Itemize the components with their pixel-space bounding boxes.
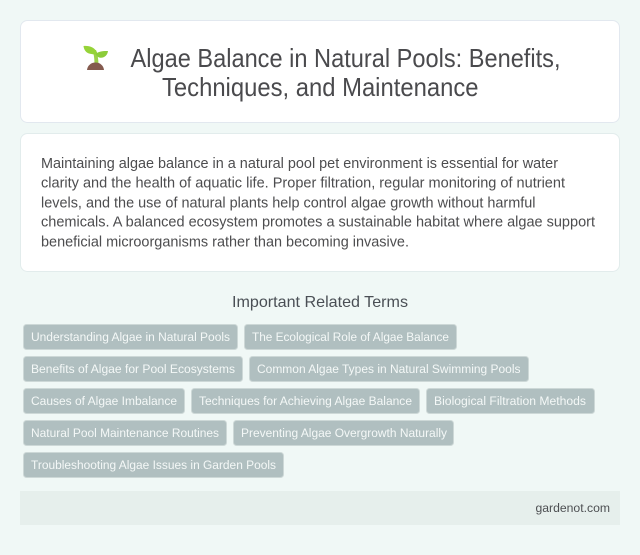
tag: Benefits of Algae for Pool Ecosystems <box>31 362 235 376</box>
tag <box>426 388 594 414</box>
tag: Common Algae Types in Natural Swimming Pools <box>257 362 520 376</box>
title text: Techniques, and Maintenance <box>162 74 478 102</box>
panel: intro paragraph: clarity and the health of aquatic life. Proper filtration, regular monitoring of nutrient <box>41 176 565 192</box>
footer: gardenot.com <box>536 501 610 515</box>
tag <box>24 420 226 446</box>
tag <box>244 324 456 350</box>
footer <box>20 491 620 525</box>
icon: seedling <box>84 46 108 70</box>
tag: Biological Filtration Methods <box>434 394 586 408</box>
panel: title <box>20 20 620 122</box>
heading: related terms: Important Related Terms <box>232 294 408 311</box>
title text: Algae Balance in Natural Pools: Benefits, <box>130 45 560 73</box>
tag <box>24 452 284 478</box>
tag <box>24 388 184 414</box>
tag: Causes of Algae Imbalance <box>31 394 177 408</box>
tag <box>234 420 454 446</box>
panel: intro paragraph: beneficial microorganisms rather than becoming invasive. <box>41 234 409 250</box>
tag: Techniques for Achieving Algae Balance <box>199 394 412 408</box>
panel: intro paragraph: levels, and the use of natural plants help control algae growth without harmful <box>41 196 536 212</box>
tag: Understanding Algae in Natural Pools <box>31 330 230 344</box>
panel: intro paragraph <box>20 134 620 272</box>
tag: Preventing Algae Overgrowth Naturally <box>241 426 448 440</box>
tag <box>24 356 242 382</box>
tag <box>24 324 238 350</box>
tag: The Ecological Role of Algae Balance <box>252 330 449 344</box>
tag: Natural Pool Maintenance Routines <box>31 426 219 440</box>
panel: intro paragraph: chemicals. A balanced ecosystem promotes a sustainable habitat where algae support <box>41 215 595 231</box>
panel: intro paragraph: Maintaining algae balance in a natural pool pet environment is essential for water <box>41 156 558 172</box>
title text <box>130 45 560 102</box>
tag <box>250 356 528 382</box>
tag: Troubleshooting Algae Issues in Garden Pools <box>31 458 276 472</box>
tag <box>192 388 420 414</box>
tags: related terms <box>24 324 594 478</box>
